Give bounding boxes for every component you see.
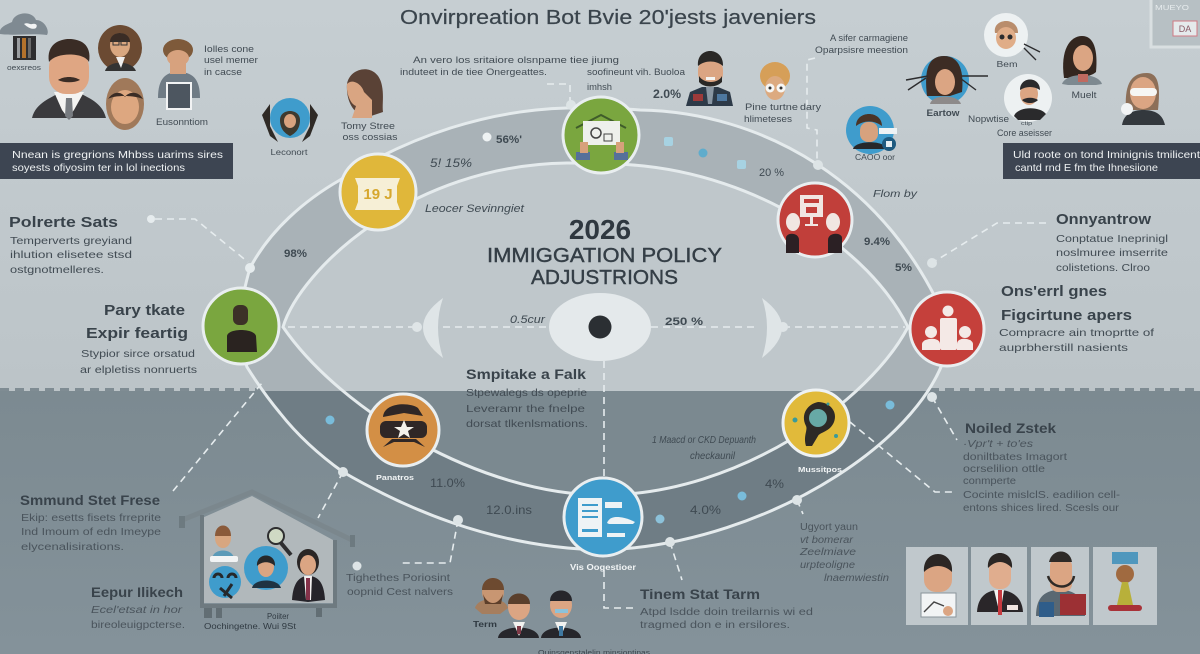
text block: Ugyort yaun: lnaemwiestin [824,573,889,584]
text block: Onnyantrow: Conptatue Ineprinigl [1056,234,1168,245]
text block: Noiled Zstek: ocrselilion ottle [963,463,1045,475]
panel: house with figures: Oochingetne. Wui 9St [204,622,297,631]
text block: Onnyantrow: noslmuree imserrite [1056,248,1169,259]
ring percentages: 4% [765,477,784,491]
central heading: 2026 [569,214,631,245]
figure: moustached man in white circle: Nopwtise [968,114,1009,124]
figure: moustached man in white circle: Core aseisser [997,128,1052,138]
title: Onvirpreation Bot Bvie 20'jests javeniers [400,7,816,29]
figure: long-haired woman [1062,36,1102,100]
node captions: Mussitpos [798,465,842,474]
text block: Ons'errl gnes: Figcirtune apers [1001,307,1132,324]
icon: cloud and barcode: oexsreos [7,65,42,72]
text block: Pary tkate: Pary tkate [104,302,185,319]
figure: woman with tan hair [106,78,144,130]
text block: Noiled Zstek: Cocinte mislclS. eadilion cell- [963,489,1121,501]
node: yellow calendar: 19 J [363,186,393,203]
callout: right dark banner: Uld roote on tond Iminignis tmilicent [1013,149,1200,161]
text block: Pary tkate: Expir feartig [86,325,188,342]
text block: Noiled Zstek [963,421,1121,514]
text block: Ugyort yaun: Zeelmiave [799,547,857,558]
text: top right note: Oparpsisre meestion [815,45,908,56]
figure: moustached man in white circle [968,74,1052,138]
text: top left note: Iolles cone [204,44,254,55]
text block: Polrerte Sats [9,215,132,276]
icon: top right framed card [1151,0,1200,47]
text block: Ugyort yaun: urpteoligne [800,560,855,571]
text block: Smpitake a Falk [466,367,588,430]
text block: Smpitake a Falk: Smpitake a Falk [466,367,587,382]
node: yellow magnifier [783,390,849,456]
ring percentages: 98% [284,248,307,260]
icon: person in hands: Leconort [270,147,308,157]
figure: man in white circle with glasses [984,13,1040,69]
text block: Tinem Stat Tarm: Atpd lsdde doin treilarnis wi ed [640,607,813,618]
text block: Maacd note: 1 Maacd or CKD Depuanth [652,435,756,446]
text block: Polrerte Sats: Polrerte Sats [9,215,118,231]
text block: Onnyantrow [1056,211,1169,274]
text: top centre note: induteet in de tiee Onergeattes. [400,67,547,78]
icon: top right framed card: DA [1179,24,1191,34]
text block: Smmund Stet Frese: Smmund Stet Frese [20,493,161,508]
text: top left note: usel memer [204,55,258,66]
text block: Maacd note: checkaunil [690,451,736,462]
ring percentages: 5% [895,262,912,274]
figure: side profile head: oss cossias [342,132,398,143]
text block: Polrerte Sats: ostgnotmelleres. [10,265,104,276]
node captions [376,465,842,572]
callout: left dark banner: Nnean is gregrions Mhbss uarims sires [12,149,223,161]
ring percentages: 56%' [496,134,522,146]
panel: house with figures [179,492,355,631]
ring percentages: Flom by [873,188,918,200]
text block: Smpitake a Falk: Leveramr the fnelpe [466,403,585,415]
text block: Ugyort yaun: Ugyort yaun [800,522,858,533]
figure: man in blue circle [846,106,897,162]
text block: Smmund Stet Frese: Ind Imoum of edn Imeype [21,527,162,538]
text block: Eepur Ilikech [91,584,185,631]
ring percentages: 4.0% [690,503,721,517]
node: orange star [367,394,439,466]
ring percentages: 0.5cur [510,314,547,326]
text block: Pary tkate [80,302,197,376]
icon: cloud and barcode [0,13,48,72]
text: top right note [815,33,908,56]
ring percentages: 2.0% [653,87,681,101]
figure: blond head: Pine turtne [745,102,798,113]
figure: blond head: hlimeteses [744,114,792,125]
text: top centre note: An vero los sritaiore olsnpame tiee jiumg [413,55,619,66]
text: top left note: in cacse [204,67,242,78]
figure: blond head [744,62,821,125]
text block: Smmund Stet Frese: Ekip: esetts fisets frreprite [21,513,162,524]
text block: Noiled Zstek: ·Vpr't + to'es [963,438,1034,450]
background: lower dark section [0,391,1200,654]
connector dashes and markers [147,58,1046,608]
text block: Eepur Ilikech: Eepur Ilikech [91,584,183,600]
text block: Eepur Ilikech: bireoleuigpcterse. [91,620,185,631]
ring percentages [284,87,918,517]
ring percentages: Leocer Sevinngiet [425,203,525,215]
central heading [487,214,722,289]
text block: Onnyantrow: Onnyantrow [1056,211,1151,228]
text block: Smpitake a Falk: Stpewalegs ds opeprie [466,387,587,399]
node captions: Vis Oogestioer [570,563,636,572]
ring percentages: 9.4% [864,236,890,248]
text: Tighethes note: Tighethes Poriosint [346,573,450,584]
panel: house with figures: Poiiter [267,612,289,621]
figure: man in white circle with glasses: Bem [996,59,1018,69]
text block: Onnyantrow: colistetions. Clroo [1056,263,1151,274]
node: left green person [203,288,279,364]
text: top centre note: imhsh [587,82,612,93]
text block: Smmund Stet Frese [20,493,162,553]
text: top centre note [400,55,686,93]
text block: Tinem Stat Tarm: Tinem Stat Tarm [640,586,760,602]
figure: woman with speech puff [1121,73,1165,125]
callout: left dark banner [0,143,233,179]
figure: boy with tablet [156,39,208,128]
node: right red group [910,292,984,366]
panel: four portrait tiles [906,547,1157,625]
text block: Noiled Zstek: conmperte [963,475,1016,487]
figure: blond head: dary [800,102,821,113]
figure: large man with moustache [32,39,106,120]
text block: Smpitake a Falk: dorsat tlkenlsmations. [466,418,588,430]
ring percentages: 5! 15% [430,156,472,170]
text: top centre note: soofineunt vih. Buoloa [587,67,686,78]
callout: left dark banner: soyests ofiyosim ter in lol inections [12,162,185,174]
background: upper light section [0,0,1200,391]
figure: woman in blue circle with arrows: Eartow [926,108,960,119]
figure: bearded man in uniform [686,51,733,106]
figure: woman with glasses [98,25,142,71]
ring percentages: 11.0% [430,476,465,490]
figure: three men [473,578,581,638]
icon: person in hands [262,98,318,157]
node: red building [778,183,852,257]
text block: Smmund Stet Frese: elycenalisirations. [21,542,124,553]
text: top right note: A sifer carmagiene [830,33,908,44]
figure: man in blue circle: CAOO oor [855,152,895,162]
node: top green [563,97,639,173]
text block: Eepur Ilikech: Ecel'etsat in hor [91,605,183,616]
text: Tighethes note: oopnid Cest nalvers [347,587,453,598]
callout: right dark banner [1003,143,1200,179]
ring percentages: 12.0.ins [486,503,532,517]
central heading: ADJUSTRIONS [531,267,678,289]
text block: Ons'errl gnes: Compracre ain tmoprtte of [999,327,1154,339]
text block: Ugyort yaun [799,522,889,584]
figure: side profile head [341,69,398,143]
text block: Tinem Stat Tarm: tragmed don e in ersilores. [640,620,790,631]
figure: boy with tablet: Eusonntiom [156,117,208,128]
text block: Ons'errl gnes [999,283,1154,354]
text block: Ons'errl gnes: Ons'errl gnes [1001,283,1107,300]
text block: Pary tkate: ar elpletiss nonruerts [80,365,197,376]
text block: Tinem Stat Tarm [640,586,813,631]
text block: Noiled Zstek: entons shices lired. Scesls our [963,502,1120,514]
ring percentages: 20 % [759,167,784,179]
callout: right dark banner: cantd rnd E fm the Ihnesiione [1015,162,1158,174]
figure: long-haired woman: Muelt [1072,90,1097,100]
node captions: Panatros [376,473,414,482]
central heading: IMMIGGATION POLICY [487,245,722,267]
text block: Noiled Zstek: doniltbates Imagort [963,451,1067,463]
node: yellow calendar [340,154,416,230]
text block: Maacd note [652,435,756,462]
figure: moustached man in white circle: ctip [1021,121,1032,127]
text block: Ugyort yaun: vt bomerar [800,535,854,546]
icon: top right framed card: MUEYO [1155,3,1189,12]
node: blue document [564,478,642,556]
text: Tighethes note [346,573,453,598]
text block: Pary tkate: Stypior sirce orsatud [81,349,195,360]
elliptical policy ring [238,108,950,550]
figure: three men: Term [473,620,497,629]
figure: woman in blue circle with arrows [906,56,988,119]
text block: Polrerte Sats: Temperverts greyiand [10,236,132,247]
centre eye graphic [412,293,788,361]
ring percentages: 250 % [665,316,703,328]
text block: Polrerte Sats: ihlution elisetee stsd [10,250,132,261]
text block: Ons'errl gnes: auprbherstill nasients [999,342,1128,354]
text block: Noiled Zstek: Noiled Zstek [965,421,1057,436]
text: top left note [204,44,258,78]
figure: side profile head: Tomy Stree [341,121,395,132]
